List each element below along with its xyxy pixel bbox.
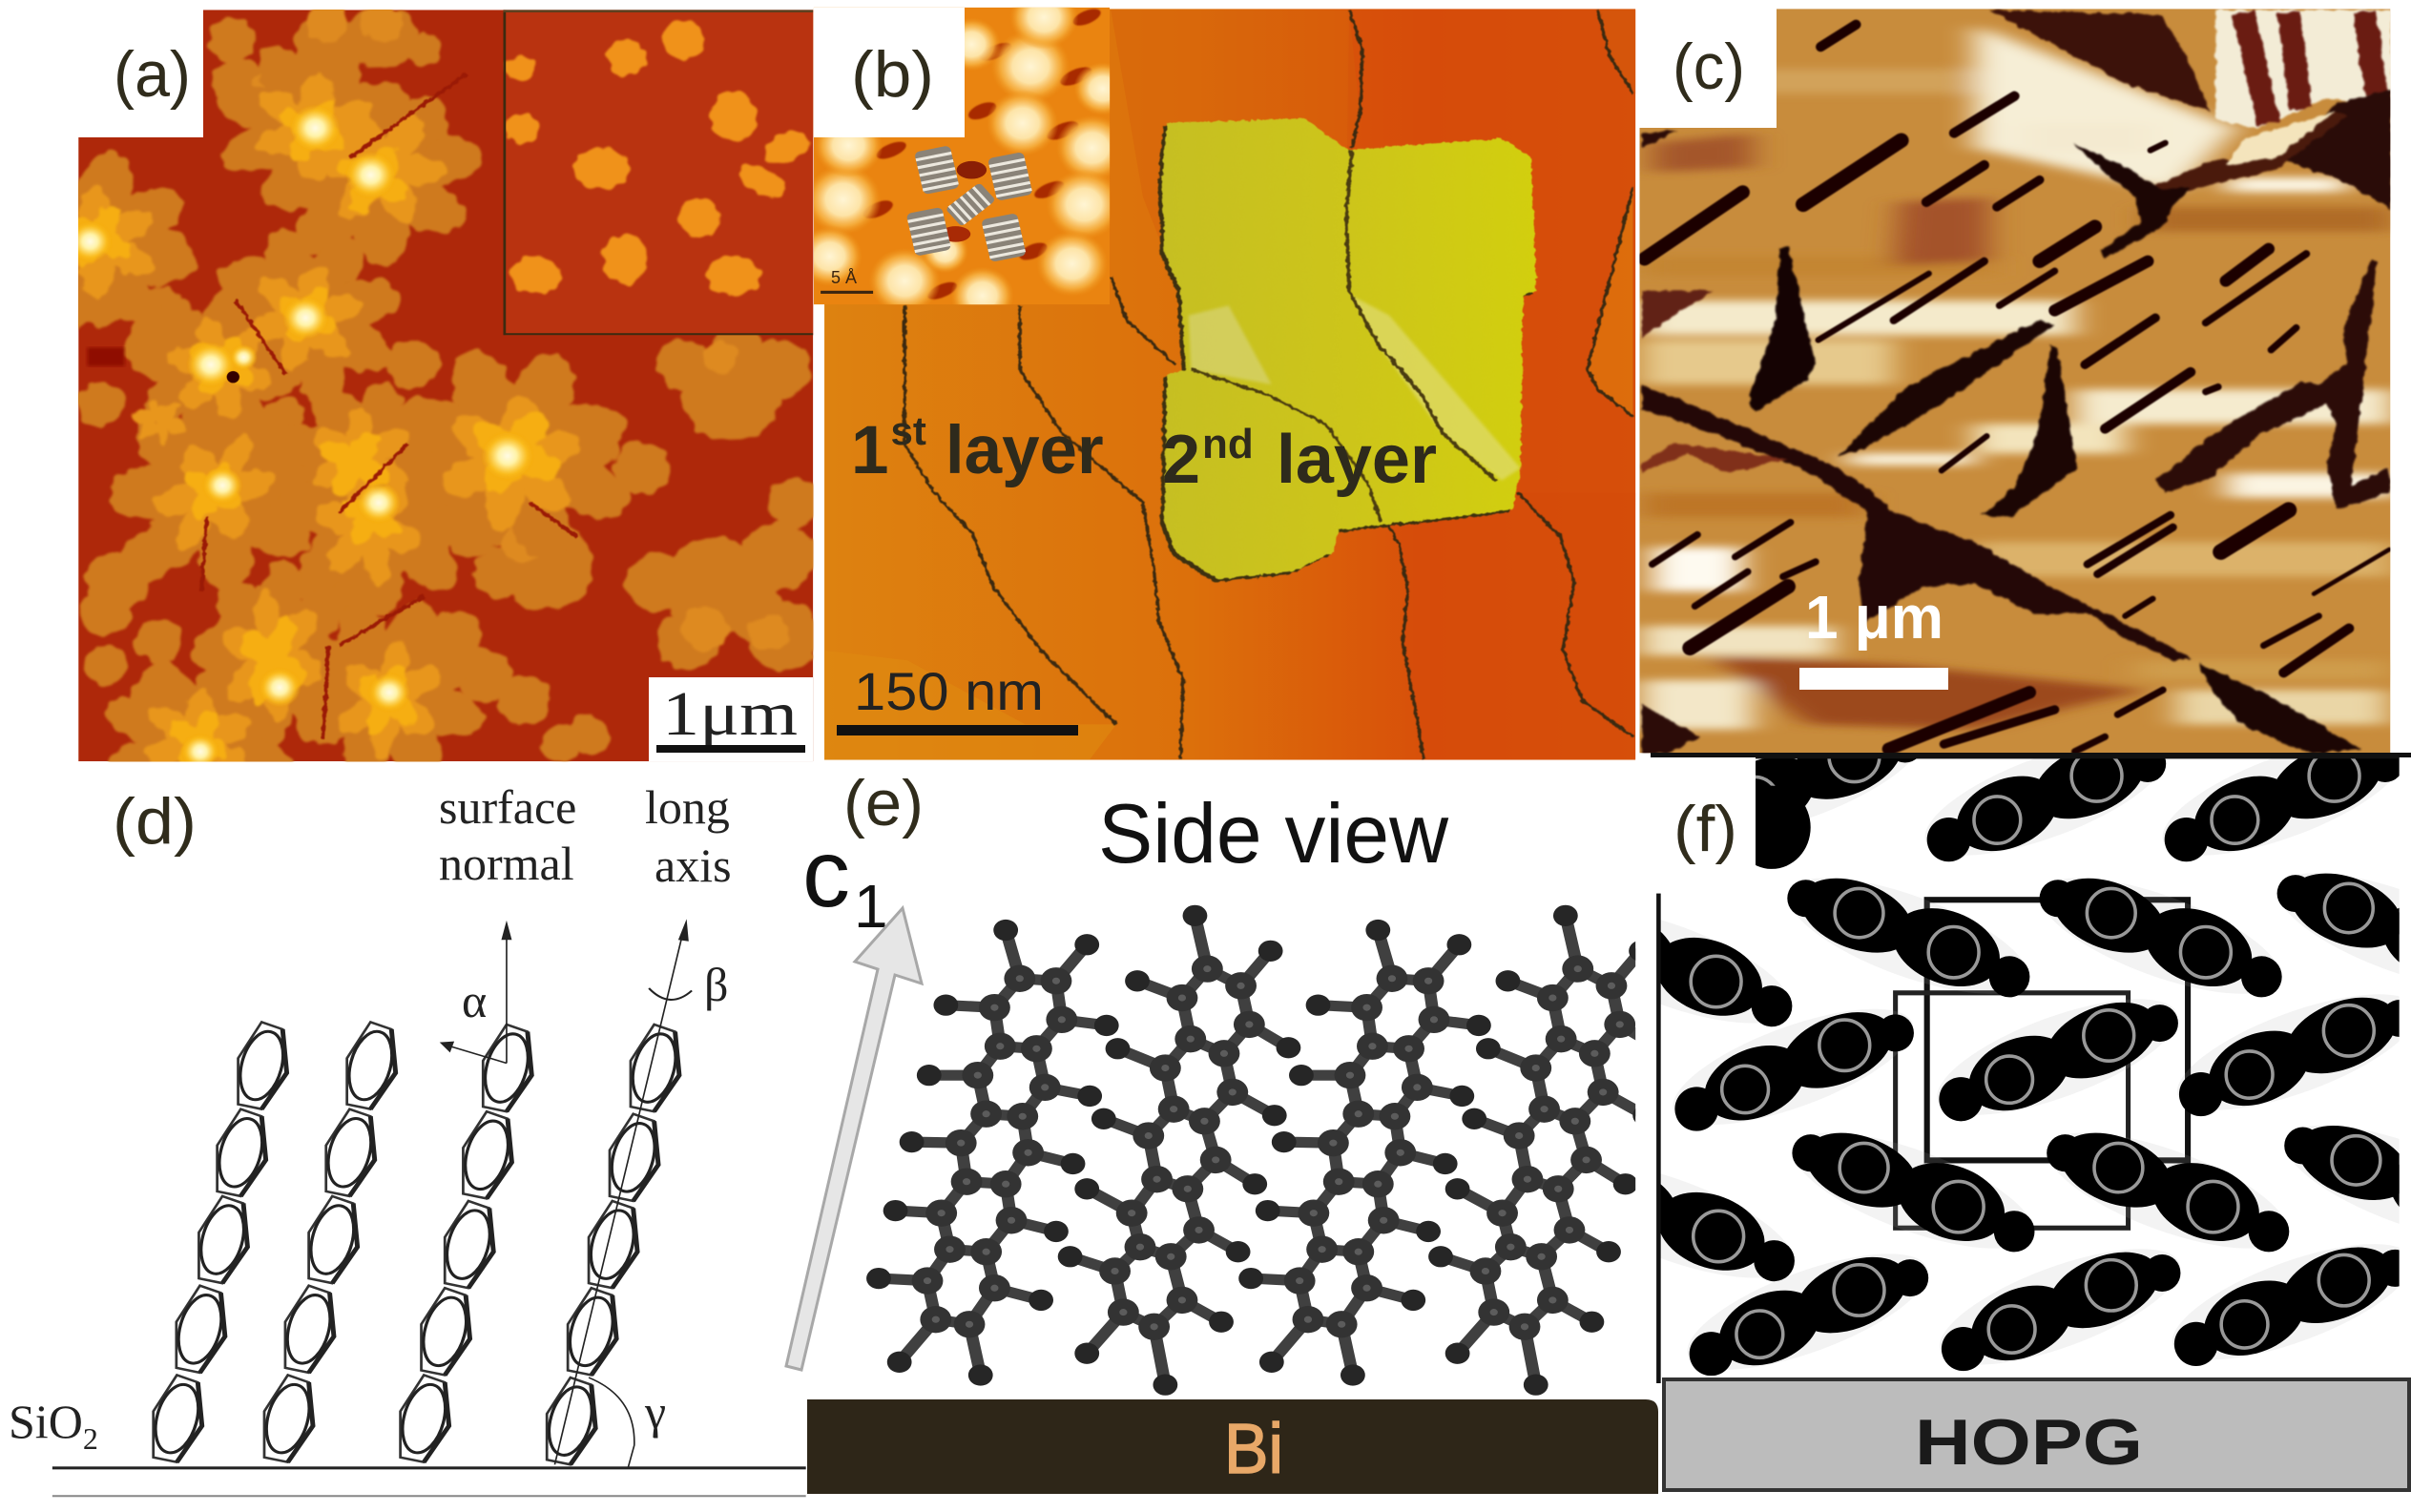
substrate lines <box>52 1466 806 1497</box>
panel b scale bar <box>837 661 1078 735</box>
panel e label: (e) <box>843 767 924 839</box>
label: alpha: α <box>462 974 487 1027</box>
molecule column 3 <box>1251 930 1479 1375</box>
molecules <box>1537 696 2411 1394</box>
molecule column 1 <box>879 930 1107 1375</box>
second layer annotation: layer <box>1277 422 1437 498</box>
molecule column 2 <box>260 1022 399 1462</box>
panel b label background <box>814 8 965 137</box>
arrow: long axis <box>554 919 692 1464</box>
substrate: HOPG: HOPG <box>1915 1406 2143 1479</box>
panel a scale bar: 1μm <box>662 679 798 749</box>
axis label c1: c <box>802 820 850 927</box>
dark channels <box>201 73 577 739</box>
panel f label: (f) <box>1673 793 1737 865</box>
panel c label: (c) <box>1673 31 1745 103</box>
first layer annotation: layer <box>946 413 1104 488</box>
flower bright centers <box>61 96 567 771</box>
molecule column 2 <box>1070 916 1288 1385</box>
label: long axis: axis <box>655 839 732 892</box>
label: SiO2: SiO <box>9 1395 83 1448</box>
panel d label: (d) <box>113 785 197 858</box>
molecule column 4 <box>542 1025 682 1464</box>
first layer annotation: 1 <box>851 413 889 488</box>
molecule overlay <box>906 145 1033 262</box>
molecule column 3 <box>396 1025 535 1462</box>
second layer flake <box>1158 118 1536 582</box>
flower mid lobes <box>78 72 580 761</box>
first layer annotation: st <box>891 408 926 453</box>
heading: side view: Side view <box>1098 786 1448 880</box>
panel a inset: isolated islands <box>503 10 814 336</box>
label: surface normal: normal <box>439 837 574 890</box>
panel f: top view molecular packing on HOPG <box>1537 696 2411 1394</box>
panel f top border <box>1651 753 2411 757</box>
panel a scale bar <box>649 677 813 761</box>
label: surface normal <box>439 780 576 890</box>
panel b scale bar: 150 nm <box>854 661 1044 721</box>
panel c: AFM image with dark needle trenches <box>1639 9 2392 754</box>
panel b: AFM terraces with second layer flake <box>824 9 1635 760</box>
panel f label background <box>1649 757 1756 885</box>
panel c scale bar <box>1799 583 1948 690</box>
label: gamma: γ <box>644 1385 666 1439</box>
panel e: side view crystal structure on Bi <box>879 916 1659 1385</box>
label: SiO2: 2 <box>83 1421 98 1456</box>
axis label c1: 1 <box>854 872 888 941</box>
inset scale label: 5 Å <box>831 268 857 287</box>
panel b label: (b) <box>851 38 934 111</box>
panel c scale bar: 1 μm <box>1805 583 1943 652</box>
second layer annotation: 2 <box>1162 422 1200 498</box>
panel d: pentacene tilt schematic on SiO2 <box>52 919 806 1497</box>
substrate: Bi: Bi <box>1224 1409 1283 1488</box>
unit cell frames <box>1896 900 2188 1228</box>
substrate: HOPG <box>1664 1379 2409 1490</box>
label: long axis: long <box>645 780 730 834</box>
label: beta: β <box>704 958 728 1011</box>
panel b inset: molecular resolution image <box>813 8 1111 305</box>
substrate: Bi <box>807 1399 1658 1494</box>
label: long axis <box>645 780 732 892</box>
arrow: alpha direction <box>440 1042 507 1063</box>
label: surface normal: surface <box>439 780 576 834</box>
panel a: AFM dendritic islands <box>78 10 813 761</box>
panel a label: (a) <box>114 38 191 111</box>
arrow: surface normal <box>501 921 511 1063</box>
panel c label background <box>1639 0 1777 128</box>
molecule column 4 <box>1441 916 1659 1385</box>
dark trench shapes <box>1642 10 2392 754</box>
angle arc gamma <box>589 1377 634 1468</box>
bright flower cores <box>68 105 534 769</box>
arrow: c1 axis <box>786 908 922 1370</box>
second layer annotation: nd <box>1202 421 1254 467</box>
flower outer lobes <box>78 44 629 761</box>
panel a label background <box>57 0 203 137</box>
molecule column 1 <box>149 1022 290 1462</box>
